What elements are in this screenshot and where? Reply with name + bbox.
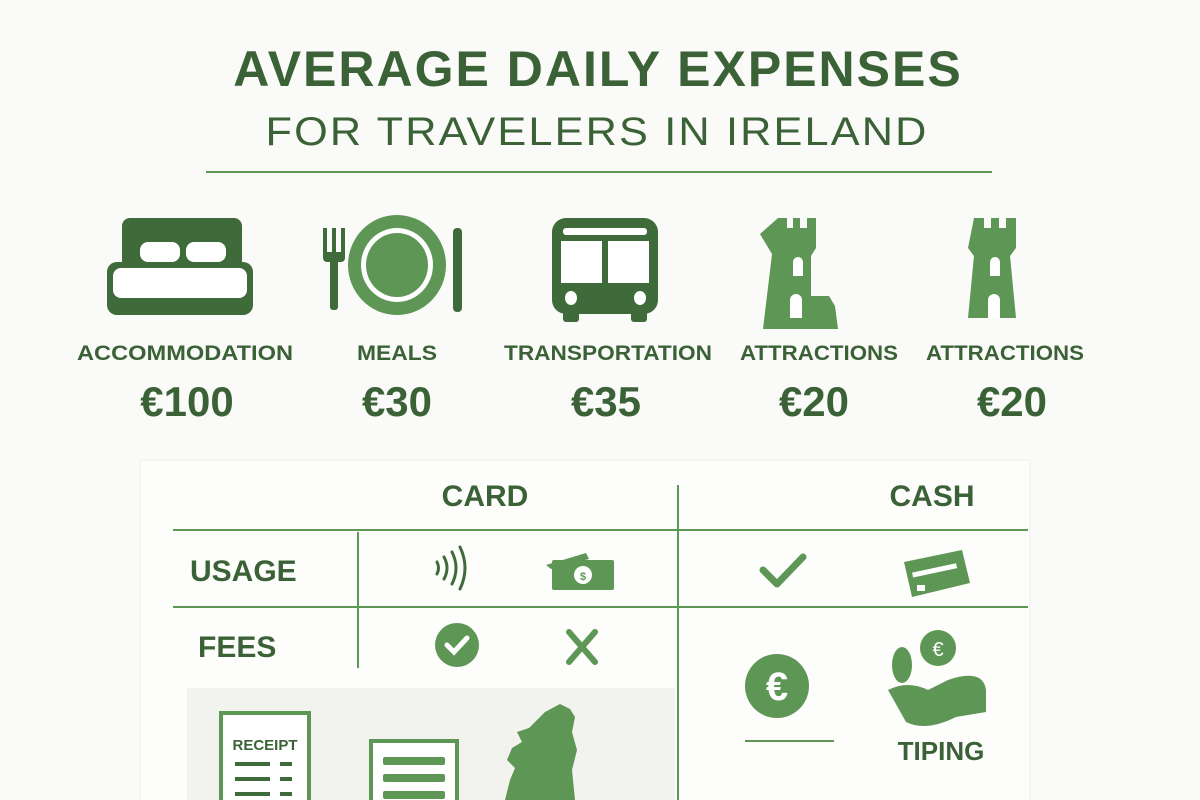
title: AVERAGE DAILY EXPENSES	[233, 41, 963, 97]
category labels: ATTRACTIONS	[740, 342, 898, 365]
icon: card	[904, 550, 970, 597]
category labels: ATTRACTIONS	[926, 342, 1084, 365]
icon: euro coin: €	[766, 665, 788, 709]
tipping label: TIPING	[898, 736, 984, 766]
panel: receipts and map	[187, 688, 675, 800]
prices: €100	[140, 378, 234, 425]
icon: cash bills	[546, 553, 614, 590]
icon: ireland map	[505, 704, 577, 800]
panel: receipts and map: RECEIPT	[232, 737, 298, 754]
prices: €30	[362, 378, 432, 425]
icon: bus	[552, 218, 658, 322]
icon: cash bills: $	[580, 571, 586, 583]
icon: tipping hand: €	[932, 639, 944, 661]
prices: €20	[977, 378, 1047, 425]
icon: euro coin	[745, 654, 809, 718]
title	[233, 41, 963, 154]
icon: check	[763, 557, 803, 584]
icon: tower 1	[760, 218, 838, 329]
column headings: CARD	[442, 480, 528, 513]
prices	[140, 378, 1047, 425]
category labels: MEALS	[357, 342, 437, 365]
prices: €20	[779, 378, 849, 425]
category labels: ACCOMMODATION	[77, 342, 293, 365]
icon: contactless	[437, 547, 465, 589]
icon: check circle	[435, 623, 479, 667]
row labels	[190, 555, 297, 664]
column headings	[442, 480, 975, 513]
icon: cross	[569, 632, 595, 662]
icon: tipping hand	[888, 630, 986, 726]
subtitle: FOR TRAVELERS IN IRELAND	[266, 110, 928, 154]
icon: tower 2	[968, 218, 1016, 318]
column headings: CASH	[889, 480, 975, 513]
prices: €35	[571, 378, 641, 425]
row labels: FEES	[198, 631, 276, 664]
row labels: USAGE	[190, 555, 297, 588]
panel: card vs cash table	[140, 460, 1030, 800]
category labels: TRANSPORTATION	[504, 342, 712, 365]
icon: plate and cutlery	[323, 215, 462, 315]
category labels	[77, 342, 1084, 365]
icon: bed	[107, 218, 253, 315]
